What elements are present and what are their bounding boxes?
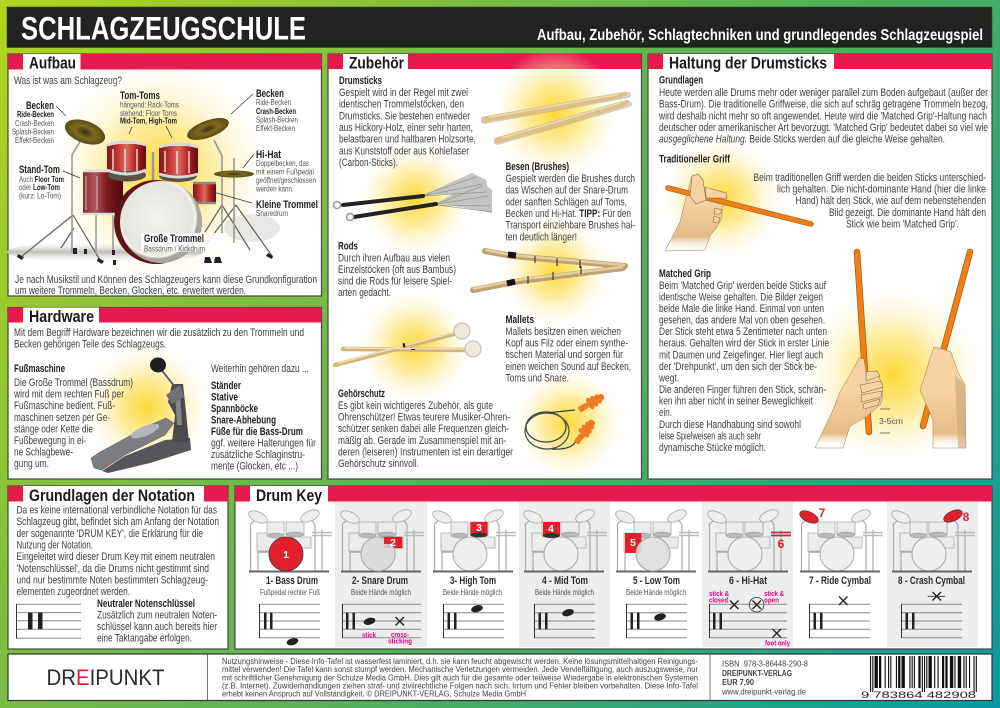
text: Gehörschutz: Ohrenschützer! Etwas teurere Musiker-Ohren- xyxy=(338,412,510,424)
text: further hardware list: Füße für die Bass-Drum xyxy=(211,426,303,438)
label: Becken left: Crash-Becken xyxy=(15,119,54,128)
text: Fußmaschine: Fußmaschine bedient. Fuß- xyxy=(14,400,115,412)
heading: Drum Key: Drum Key xyxy=(256,487,323,505)
label: Stand-Tom: Stand-Tom xyxy=(19,164,60,176)
text: Rods: Einzelstöcken (oft aus Bambus) xyxy=(338,264,456,276)
text: Traditioneller Griff xyxy=(754,172,986,230)
text: further hardware list: Snare-Abhebung xyxy=(211,414,276,426)
text: Matched Grip: gesehen, das andere Mal von oben gesehen. xyxy=(659,314,825,326)
text: further hardware list: Weiterhin gehören dazu ... xyxy=(211,363,309,375)
text: Mallets: Kopf aus Filz oder einem synthe- xyxy=(506,338,628,350)
panel: Drum Key xyxy=(235,486,992,649)
text: Matched Grip: Beim 'Matched Grip' werden beide Sticks auf xyxy=(659,280,826,292)
key 4: mid tom: 4 - Mid Tom xyxy=(542,575,588,587)
text: Drumsticks: Gespielt wird in der Regel mit zwei xyxy=(339,87,468,99)
text: Neutraler Notenschlüssel: Zusätzlich zum neutralen Noten- xyxy=(97,610,217,622)
label: Hi-Hat: Doppelbecken, das xyxy=(256,159,309,168)
key 6: hi-hat xyxy=(702,502,793,648)
left cymbal xyxy=(62,114,108,150)
key 3: high tom xyxy=(431,507,516,638)
label: Stand-Tom: Auch Floor Tom xyxy=(19,175,64,184)
floor tom xyxy=(83,170,123,215)
text: further hardware list: Stative xyxy=(211,392,238,404)
rods photo xyxy=(473,250,625,290)
text: Matched Grip: der 'Drehpunkt', um den sich der Stick be- xyxy=(659,361,817,373)
usage notes: mittel verwenden! Die Tafel kann sonst stumpf werden. Mechanische Verletzungen vermeiden. Jede Vervielfältigung, auch auszugsweise, nur xyxy=(222,665,698,674)
text: Drumsticks: (Carbon-Sticks). xyxy=(339,157,398,169)
text: further hardware list xyxy=(211,363,316,472)
footer panel xyxy=(8,654,992,701)
text: Drumsticks: Drumsticks xyxy=(339,75,382,87)
text: further hardware list: Ständer xyxy=(211,380,241,392)
text: Gehörschutz: Es gibt kein wichtigeres Zubehör, als gute xyxy=(338,400,493,412)
key 2: snare drum: sticking xyxy=(388,638,412,646)
key 2: snare drum: cross- xyxy=(391,632,410,639)
publisher info: DREIPUNKT-VERLAG xyxy=(722,669,792,678)
label: Kleine Trommel: Kleine Trommel xyxy=(256,199,318,211)
key 3: high tom: Beide Hände möglich xyxy=(443,588,502,597)
label: Stand-Tom: (kurz: Lo-Tom) xyxy=(19,192,61,200)
intro text: Was ist was am Schlagzeug? xyxy=(14,75,122,87)
text: Gehörschutz: mäßig ab. Gerade im Zusammenspiel mit an- xyxy=(338,435,506,447)
text: Drumsticks: belastbaren und haltbaren Holzsorte, xyxy=(339,134,476,146)
label: Hi-Hat xyxy=(255,149,316,194)
heading: Haltung der Drumsticks: Haltung der Drumsticks xyxy=(669,54,827,72)
text: Fußmaschine: wird mit dem rechten Fuß per xyxy=(13,389,124,401)
leader lines xyxy=(56,94,254,203)
text: Matched Grip: identische Weise gehalten. Die Bilder zeigen xyxy=(659,292,823,304)
text: Gehörschutz: deren (leiseren) Instrumenten ist ein derartiger xyxy=(338,446,513,458)
text: notation intro: Da es keine international verbindliche Notation für das xyxy=(16,504,217,516)
text: Matched Grip: ein. xyxy=(659,407,672,419)
text: Fußmaschine: maschinen setzen per Ge- xyxy=(14,412,110,424)
text: Rods: arten gedacht. xyxy=(338,287,391,299)
key 8: crash cymbal: 8 xyxy=(963,510,970,524)
label: Becken left: Effekt-Becken xyxy=(15,136,54,145)
key 4: mid tom: 4 xyxy=(548,523,554,535)
text: Gehörschutz xyxy=(338,388,513,470)
text: notation intro: der sogenannte 'DRUM KEY', die Erklärung für die xyxy=(16,528,203,540)
key 6: hi-hat: stick & xyxy=(709,591,729,598)
usage notes xyxy=(222,657,698,699)
key 6: hi-hat: closed xyxy=(709,598,728,604)
text: Besen: Besen (Brushes) xyxy=(506,161,569,173)
key 5: low tom: 5 - Low Tom xyxy=(633,575,680,587)
left rack tom xyxy=(107,142,146,182)
label: Becken left: Becken xyxy=(26,100,54,112)
barcode: 9 783864 482908 xyxy=(861,690,976,701)
label: Tom-Toms: hängend: Rack-Toms xyxy=(120,100,179,110)
text: Grundlagen: ausgeglichene Haltung. Beide Sticks werden auf die gleiche Weise gehalten. xyxy=(659,134,945,146)
text: further hardware list: mente (Glocken, etc ...) xyxy=(211,460,298,472)
label: Hi-Hat: Hi-Hat xyxy=(256,149,281,161)
label: Stand-Tom: oder Low-Tom xyxy=(19,183,60,192)
illustration: traditional grip xyxy=(665,174,811,251)
publisher info xyxy=(721,660,809,696)
text: further hardware list: Spannböcke xyxy=(211,403,258,415)
bass drum pedal illustration xyxy=(91,358,191,473)
text: Matched Grip: Durch diese Handhabung sind sowohl xyxy=(659,419,801,431)
panel: Haltung der Drumsticks xyxy=(648,54,992,479)
text: Matched Grip: Matched Grip xyxy=(659,268,711,280)
key 2: snare drum: 2 xyxy=(390,537,396,549)
text: Besen: ten deutlich länger! xyxy=(506,231,577,243)
text: Grundlagen xyxy=(658,74,988,146)
ear plugs photo xyxy=(525,390,607,449)
key 8: crash cymbal: 8 - Crash Cymbal xyxy=(898,575,965,587)
label: Tom-Toms: Tom-Toms xyxy=(120,90,160,102)
text: Gehörschutz: Gehörschutz xyxy=(338,388,385,400)
label: Becken left xyxy=(12,100,54,145)
text: notation intro xyxy=(16,504,219,598)
closing text xyxy=(15,274,317,297)
key 4: mid tom xyxy=(519,502,610,647)
text: Gehörschutz: schützer senken dabei alle Frequenzen gleich- xyxy=(338,423,509,435)
text: Rods: Durch ihren Aufbau aus vielen xyxy=(338,252,450,264)
intro text: Becken gehörigen Teile des Schlagzeugs. xyxy=(14,339,166,351)
text: Neutraler Notenschlüssel: Neutraler Notenschlüssel xyxy=(97,598,195,610)
publisher info: ISBN 978-3-86448-290-8 xyxy=(722,660,809,668)
key 5: low tom: 5 xyxy=(630,537,636,549)
key 3: high tom: 3 xyxy=(476,522,482,534)
key 5: low tom xyxy=(614,507,699,638)
text: Fußmaschine: stänge oder Kette die xyxy=(14,423,93,435)
text: Drumsticks: aus Hickory-Holz, einer sehr harten, xyxy=(339,122,473,134)
usage notes: (z.B. Internet). Zuwiderhandlungen ziehen straf- und zivilrechtliche Folgen nach sich. Irrtum und Fehler bleiben vorbehalten. Diese Info-Tafel xyxy=(222,682,698,690)
text: Mallets: Toms und Snare. xyxy=(506,372,569,384)
intro text xyxy=(14,327,304,351)
text: Rods xyxy=(338,240,456,299)
text: further hardware list: ggf. weitere Halterungen für xyxy=(211,438,316,450)
key 6: hi-hat: 6 xyxy=(778,537,785,551)
text: Neutraler Notenschlüssel: eine Taktangabe erfolgen. xyxy=(97,633,192,645)
text: notation intro: elementen zugeordnet werden. xyxy=(16,586,130,598)
text: Fußmaschine: Die Große Trommel (Bassdrum) xyxy=(14,377,133,389)
logo: Dreipunkt: DREIPUNKT xyxy=(46,665,164,690)
key 7: ride cymbal: 7 - Ride Cymbal xyxy=(809,575,871,587)
label: Hi-Hat: werden kann xyxy=(255,184,292,194)
illustration: matched grip hand from below xyxy=(815,252,883,448)
label: Kleine Trommel xyxy=(256,199,318,218)
usage notes: mit schriftlicher Genehmigung der Schulze Media GmbH. Dies gilt auch für die gesamte oder teilweise Wiedergabe in elektronischen Systemen xyxy=(222,673,698,682)
text: Gehörschutz: Gehörschutz sinnvoll. xyxy=(338,458,419,470)
label: Becken left: Splash-Becken xyxy=(12,128,54,136)
panel: Grundlagen der Notation xyxy=(8,486,228,649)
title: SCHLAGZEUGSCHULE xyxy=(21,10,306,46)
text: Mallets: Mallets xyxy=(506,314,534,326)
text: notation intro: 'Notenschlüssel', da die Drums nicht gestimmt sind xyxy=(16,563,209,575)
text: Mallets xyxy=(506,314,631,384)
measurement: 3-5cm xyxy=(879,409,903,433)
text: Matched Grip xyxy=(658,268,829,454)
text: Matched Grip: heraus. Gehalten wird der Stick in erster Linie xyxy=(659,338,829,350)
label: Tom-Toms xyxy=(120,90,179,126)
key 1: bass drum xyxy=(247,507,332,647)
text: Drumsticks: Drumsticks. Sie bestehen entweder xyxy=(339,110,470,122)
right rack tom xyxy=(159,144,198,182)
text: Fußmaschine: Fußmaschine xyxy=(14,363,65,375)
text: further hardware list: zusätzliche Schlaginstru- xyxy=(211,449,305,461)
mallets photo xyxy=(335,323,481,365)
text: Traditioneller Griff: Stick wie beim 'Matched Grip'. xyxy=(846,218,959,230)
text: Besen: Transport einziehbare Brushes hal- xyxy=(506,220,635,232)
label: Große Trommel xyxy=(141,233,228,254)
panel: Zubehör xyxy=(328,49,642,479)
label: Tom-Toms: Mid-Tom, High-Tom xyxy=(120,116,177,126)
text: Matched Grip: ken ihn aber nicht in seiner Beweglichkeit xyxy=(659,396,813,408)
text: Besen: Becken und Hi-Hat. TIPP: Für den xyxy=(506,208,631,220)
label: Becken right: Crash-Becken xyxy=(256,107,296,116)
text: Drumsticks xyxy=(339,75,476,169)
illustration: matched grip hand from above xyxy=(920,252,970,448)
text: notation intro: und nur bestimmte Noten bestimmten Schlagzeug- xyxy=(16,574,208,586)
text: Matched Grip: beide Male die linke Hand. Einmal von unten xyxy=(659,303,824,315)
key 5: low tom: Beide Hände möglich xyxy=(626,588,686,597)
key 7: ride cymbal: 7 xyxy=(819,506,826,520)
text: notation intro: Schlagzeug gibt, befindet sich am Anfang der Notation xyxy=(16,516,219,528)
brushes photo xyxy=(334,173,492,220)
text: Drumsticks: identischen Trommelstöcken, den xyxy=(339,99,464,111)
drumsticks photo xyxy=(484,94,629,142)
label: Becken right: Becken xyxy=(256,88,284,100)
text: Fußmaschine: gung um. xyxy=(14,458,49,470)
text: Neutraler Notenschlüssel: schlüssel kann auch bereits hier xyxy=(97,621,217,633)
key 7: ride cymbal xyxy=(798,506,883,638)
label: Becken right xyxy=(256,88,298,133)
snare drum xyxy=(193,183,216,203)
heading: Aufbau: Aufbau xyxy=(29,54,76,72)
text: Rods: sind die Rods für leisere Spiel- xyxy=(338,276,452,288)
key 3: high tom: 3- High Tom xyxy=(450,575,496,587)
right cymbal xyxy=(184,113,232,145)
text: Traditioneller Griff heading: Traditioneller Griff xyxy=(659,154,730,166)
label: Tom-Toms: stehend: Floor Toms xyxy=(120,109,177,118)
label: Große Trommel: Große Trommel xyxy=(144,233,204,245)
key 8: crash cymbal xyxy=(887,502,978,647)
publisher info: EUR 7,90 xyxy=(722,678,755,687)
publisher info: www.dreipunkt-verlag.de xyxy=(721,688,807,696)
key 1: bass drum: 1- Bass Drum xyxy=(266,575,318,587)
key 4: mid tom: Beide Hände möglich xyxy=(535,588,594,597)
key 2: snare drum: 2- Snare Drum xyxy=(352,575,408,587)
text: Fußmaschine: Fußbewegung in ei- xyxy=(14,435,86,447)
label: Stand-Tom xyxy=(19,164,64,200)
text: Matched Grip: Der Stick steht etwa 5 Zentimeter nach unten xyxy=(659,326,827,338)
key 6: hi-hat: 6 - Hi-Hat xyxy=(729,575,767,587)
text: Matched Grip: wegt. xyxy=(658,372,679,384)
barcode xyxy=(861,656,977,701)
key 6: hi-hat: open xyxy=(764,598,779,604)
text: Besen xyxy=(506,161,635,243)
text: Matched Grip: leise Spielweisen als auch sehr xyxy=(659,430,761,442)
key 2: snare drum xyxy=(335,502,427,647)
label: Hi-Hat: geöffnet/geschlossen xyxy=(256,176,316,185)
key 1: bass drum: 1 xyxy=(283,549,289,561)
text: Matched Grip: dynamische Stücke möglich. xyxy=(659,442,766,454)
key 1: bass drum: Fußpedal rechter Fuß xyxy=(260,588,320,597)
text: Besen: Gespielt werden die Brushes durch xyxy=(506,173,635,185)
title bar xyxy=(7,7,992,48)
label: Große Trommel: Bassdrum / Kickdrum xyxy=(144,244,205,254)
drum kit illustration xyxy=(7,113,280,265)
text: Besen: das Wischen auf der Snare-Drum xyxy=(506,185,628,197)
usage notes: Nutzungshinweise - Diese Info-Tafel ist wasserfest laminiert, d.h. sie kann feucht abgewischt werden. Keine lösungsmittelhaltigen Reinigungs- xyxy=(222,657,698,666)
text: notation intro: Eingeleitet wird dieser Drum Key mit einem neutralen xyxy=(16,551,215,563)
closing text: um weitere Trommeln, Becken, Glocken, etc. erweitert werden. xyxy=(15,285,246,297)
panel: Aufbau xyxy=(7,54,322,297)
label: Hi-Hat: mit einem Fußpedal xyxy=(256,168,314,176)
text: Fußmaschine: ne Schlagbewe- xyxy=(14,447,73,459)
text: Fußmaschine xyxy=(13,363,133,470)
text: Grundlagen: Grundlagen xyxy=(659,74,703,86)
closing text: Je nach Musikstil und Können des Schlagzeugers kann diese Grundkonfiguration xyxy=(15,274,317,286)
key 6: hi-hat: foot only xyxy=(765,640,790,648)
key 2: snare drum: stick xyxy=(362,632,376,640)
label: Becken right: Effekt-Becken xyxy=(256,124,295,133)
label: Becken right: Ride-Becken xyxy=(256,98,291,107)
heading: Zubehör: Zubehör xyxy=(349,54,404,72)
text: Drumsticks: aus Kunststoff oder aus Kohlefaser xyxy=(339,145,469,157)
usage notes: erhebt keinen Anspruch auf Vollständigkeit. © DREIPUNKT-VERLAG, Schulze Media GmbH xyxy=(222,690,526,699)
neutral clef staff xyxy=(16,604,81,638)
label: Kleine Trommel: Snaredrum xyxy=(256,209,288,218)
text: Matched Grip: Die anderen Finger führen den Stick, schrän- xyxy=(659,384,826,396)
panel: Hardware xyxy=(8,308,322,479)
key 2: snare drum: Beide Hände möglich xyxy=(351,588,411,597)
bass drum xyxy=(114,180,202,264)
heading: Grundlagen der Notation: Grundlagen der Notation xyxy=(29,487,195,505)
heading: Hardware: Hardware xyxy=(29,308,94,326)
measurement: 3-5cm: 3-5cm xyxy=(879,417,903,426)
label: Becken left: Ride-Becken xyxy=(17,110,54,119)
key 6: hi-hat: stick & xyxy=(764,591,784,598)
text: Mallets: tischen Material und sorgen für xyxy=(506,349,623,361)
text: notation intro: Nutzung der Notation. xyxy=(16,540,93,552)
text: Rods: Rods xyxy=(338,240,358,252)
label: Becken right: Splash-Becken xyxy=(256,116,298,124)
text: Besen: oder sanften Schlägen auf Toms, xyxy=(506,196,627,208)
text: Matched Grip: mit Daumen und Zeigefinger. Hier liegt auch xyxy=(659,349,823,361)
intro text: Mit dem Begriff Hardware bezeichnen wir die zusätzlich zu den Trommeln und xyxy=(14,327,304,339)
hi-hat xyxy=(214,170,254,178)
text: Mallets: Mallets besitzen einen weichen xyxy=(506,326,621,338)
text: Mallets: einen weichen Sound auf Becken, xyxy=(506,361,631,373)
text: Neutraler Notenschlüssel xyxy=(97,598,217,645)
